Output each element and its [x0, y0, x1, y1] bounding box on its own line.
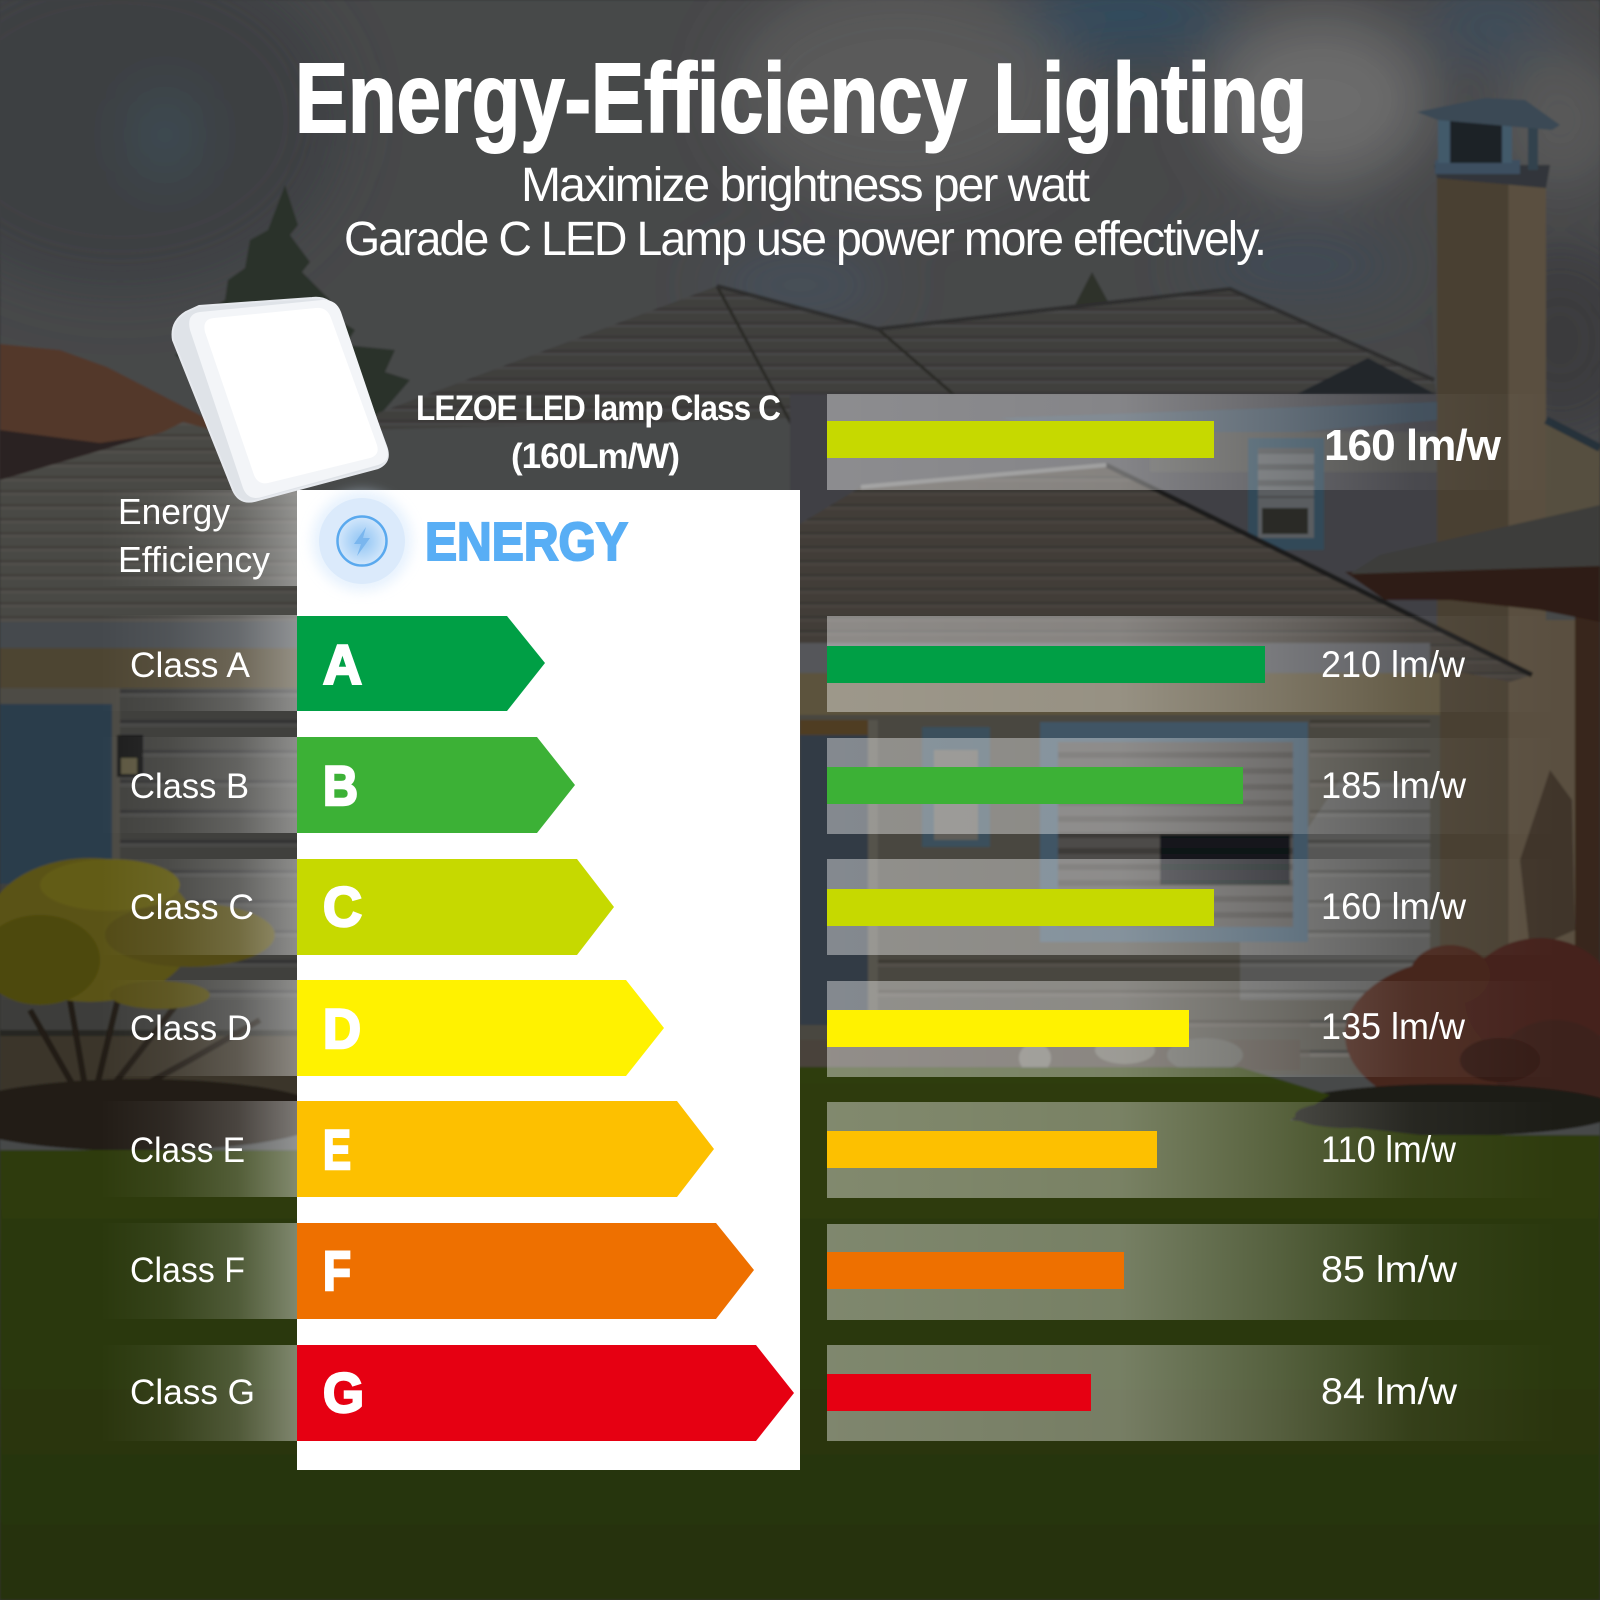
class D row — [130, 980, 1465, 1076]
letter G: G — [323, 1361, 364, 1424]
sky clouds — [0, 0, 1600, 430]
shrubs on right — [1520, 770, 1575, 950]
energy efficiency label — [118, 491, 270, 580]
class label C: Class C — [130, 888, 254, 927]
upper wall — [790, 394, 1450, 684]
arrow A — [297, 616, 545, 711]
class label A: Class A — [130, 646, 251, 685]
highlight value: 160 lm/w — [1324, 421, 1502, 470]
upper window — [1248, 438, 1324, 550]
left gable siding — [0, 422, 300, 625]
title: Energy-Efficiency Lighting — [295, 43, 1307, 153]
icon: LED ceiling lamp — [173, 298, 388, 502]
class label E: Class E — [130, 1131, 245, 1170]
subtitle: Garade C LED Lamp use power more effectively. — [344, 213, 1265, 266]
bar G — [827, 1374, 1091, 1411]
class label F: Class F — [130, 1251, 245, 1290]
gravel bed and stones — [800, 1040, 1300, 1070]
class F row — [130, 1223, 1457, 1319]
gable roof — [790, 465, 1532, 682]
bar E — [827, 1131, 1157, 1168]
lamp label — [416, 389, 781, 476]
yellow shrub — [0, 858, 275, 1115]
class B row — [130, 737, 1466, 833]
arrow B — [297, 737, 575, 833]
large window — [1040, 722, 1308, 942]
class C row — [130, 859, 1466, 955]
class G row — [130, 1345, 1457, 1441]
class label G: Class G — [130, 1373, 255, 1412]
value C: 160 lm/w — [1321, 886, 1466, 927]
bar D — [827, 1010, 1189, 1047]
panel: left label bands — [100, 490, 297, 1441]
right side wall and roof — [1546, 420, 1600, 530]
letter D: D — [323, 997, 361, 1060]
lamp label: LEZOE LED lamp Class C — [416, 389, 781, 428]
base wall and mulch — [0, 1000, 300, 1045]
highlight bar — [827, 421, 1214, 458]
letter E: E — [323, 1118, 351, 1181]
bar B — [827, 767, 1243, 804]
class A row — [130, 616, 1465, 711]
front door — [800, 730, 868, 1025]
small window — [922, 727, 990, 847]
subtitle — [344, 159, 1265, 266]
class E row — [130, 1101, 1456, 1197]
subtitle: Maximize brightness per watt — [521, 159, 1090, 212]
arrow C — [297, 859, 614, 955]
arrow E — [297, 1101, 714, 1197]
bar F — [827, 1252, 1124, 1289]
left brick roof — [0, 344, 230, 443]
energy heading: ENERGY — [425, 512, 628, 572]
wall lantern — [117, 735, 143, 777]
lower wall — [790, 673, 1440, 1073]
value D: 135 lm/w — [1321, 1006, 1465, 1047]
letter B: B — [323, 754, 358, 817]
letter F: F — [323, 1239, 351, 1302]
class label B: Class B — [130, 767, 249, 806]
lawn — [0, 1067, 1600, 1600]
lamp highlight bar and value — [827, 421, 1502, 470]
value B: 185 lm/w — [1321, 765, 1466, 806]
class label D: Class D — [130, 1009, 252, 1048]
letter A: A — [323, 633, 362, 696]
left lower siding — [0, 688, 300, 1048]
main roof — [367, 286, 1437, 430]
panel: right bar bands — [827, 394, 1560, 1441]
garage door — [0, 688, 120, 878]
energy efficiency label: Efficiency — [118, 539, 270, 580]
bar A — [827, 646, 1265, 683]
white energy panel — [297, 490, 800, 1470]
pine trees — [175, 185, 410, 430]
chimney — [1437, 168, 1546, 968]
letter C: C — [323, 875, 362, 938]
lamp label: (160Lm/W) — [511, 437, 679, 476]
arrow F — [297, 1223, 754, 1319]
mulch bed at right — [1280, 1084, 1600, 1136]
arrow D — [297, 980, 664, 1076]
value F: 85 lm/w — [1321, 1249, 1457, 1290]
bar C — [827, 889, 1214, 926]
energy efficiency label: Energy — [118, 491, 230, 532]
icon: energy bolt — [312, 491, 412, 591]
value G: 84 lm/w — [1321, 1371, 1457, 1412]
arrow G — [297, 1345, 794, 1441]
value A: 210 lm/w — [1321, 644, 1465, 685]
value E: 110 lm/w — [1321, 1129, 1456, 1170]
